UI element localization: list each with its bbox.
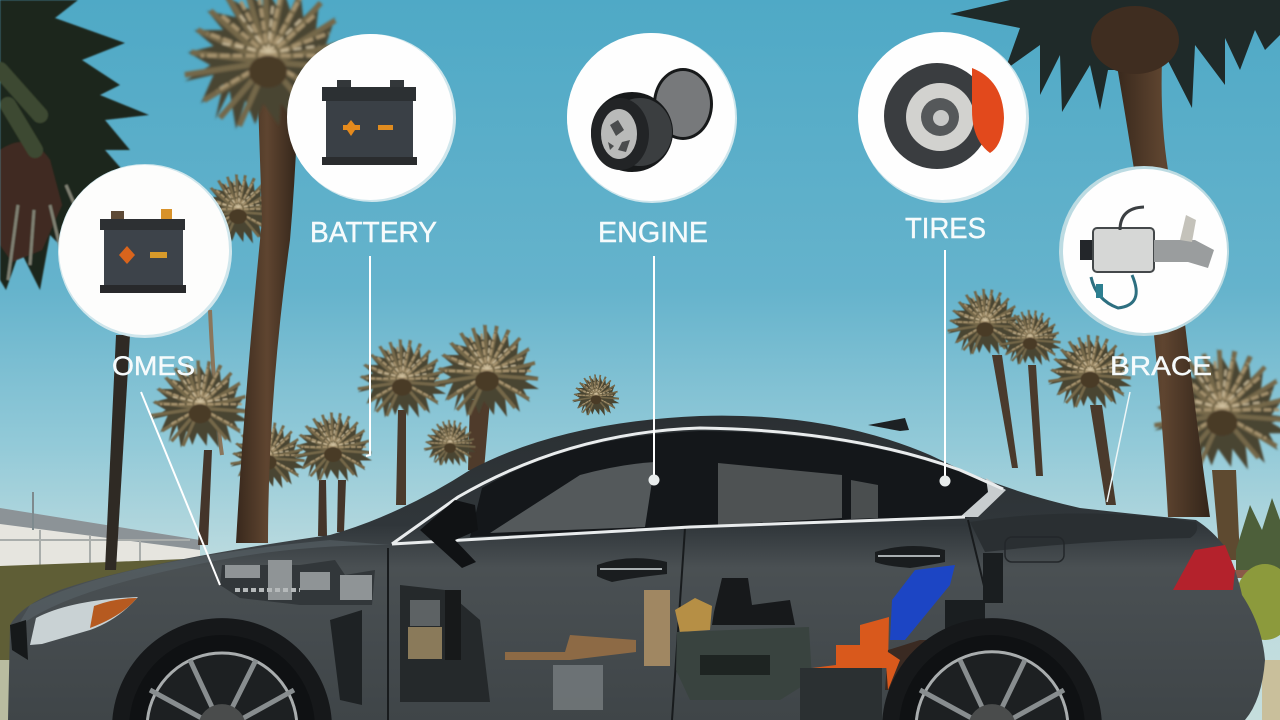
door handle front <box>597 558 667 582</box>
label ENGINE with leader line: ENGINE <box>598 217 708 249</box>
fuel door <box>1005 537 1064 562</box>
label OMES with leader line <box>112 351 220 585</box>
large dark palm top-left <box>0 0 149 290</box>
rocker door seam <box>388 520 985 720</box>
front window inner glass <box>490 462 655 533</box>
icon: transmission <box>1080 207 1214 308</box>
large dark palm top-right <box>950 0 1280 517</box>
front grille <box>10 620 28 660</box>
rear wheel <box>882 618 1102 720</box>
icon: battery <box>322 80 417 165</box>
car body <box>8 416 1265 720</box>
background: palm trees far <box>105 174 1280 720</box>
car <box>8 416 1265 720</box>
icon: battery left <box>100 209 186 293</box>
label BRACE with leader line: BRACE <box>1110 351 1212 381</box>
front wheel <box>112 618 332 720</box>
callout circle: transmission <box>1059 166 1229 336</box>
background: building and hedge <box>0 492 210 720</box>
chrome window trim <box>392 428 1003 544</box>
label TIRES with leader line <box>905 213 986 486</box>
door handle rear <box>875 546 945 568</box>
headlight <box>30 597 138 645</box>
front door cutaway parts <box>400 585 636 710</box>
label TIRES with leader line: TIRES <box>905 213 986 245</box>
rear window inner glass <box>718 463 842 525</box>
side mirror <box>420 500 478 568</box>
icon: engine <box>591 68 713 172</box>
callout circle: engine <box>567 33 737 203</box>
label ENGINE with leader line <box>598 217 708 486</box>
label OMES with leader line: OMES <box>112 351 195 381</box>
callout circle: battery <box>287 34 456 202</box>
hood shading <box>15 540 390 630</box>
rear shoulder shadow <box>970 514 1197 552</box>
label BATTERY with leader line: BATTERY <box>310 217 437 249</box>
windows <box>392 428 1006 544</box>
tail light <box>1173 545 1235 590</box>
engine bay cutaway <box>220 560 375 705</box>
callout circle: tires <box>858 32 1029 203</box>
icon: brake and tire <box>884 63 1004 169</box>
window glass <box>470 431 1002 537</box>
quarter trim <box>960 478 1006 517</box>
rear door cutaway parts <box>644 553 1003 720</box>
tall palm tree centre-left <box>185 0 351 543</box>
rear window small glass <box>851 480 878 519</box>
label BATTERY with leader line <box>310 217 437 456</box>
callout circle: left battery <box>58 164 232 338</box>
roof spoiler fin <box>868 418 909 431</box>
label BRACE with leader line <box>1107 351 1212 502</box>
